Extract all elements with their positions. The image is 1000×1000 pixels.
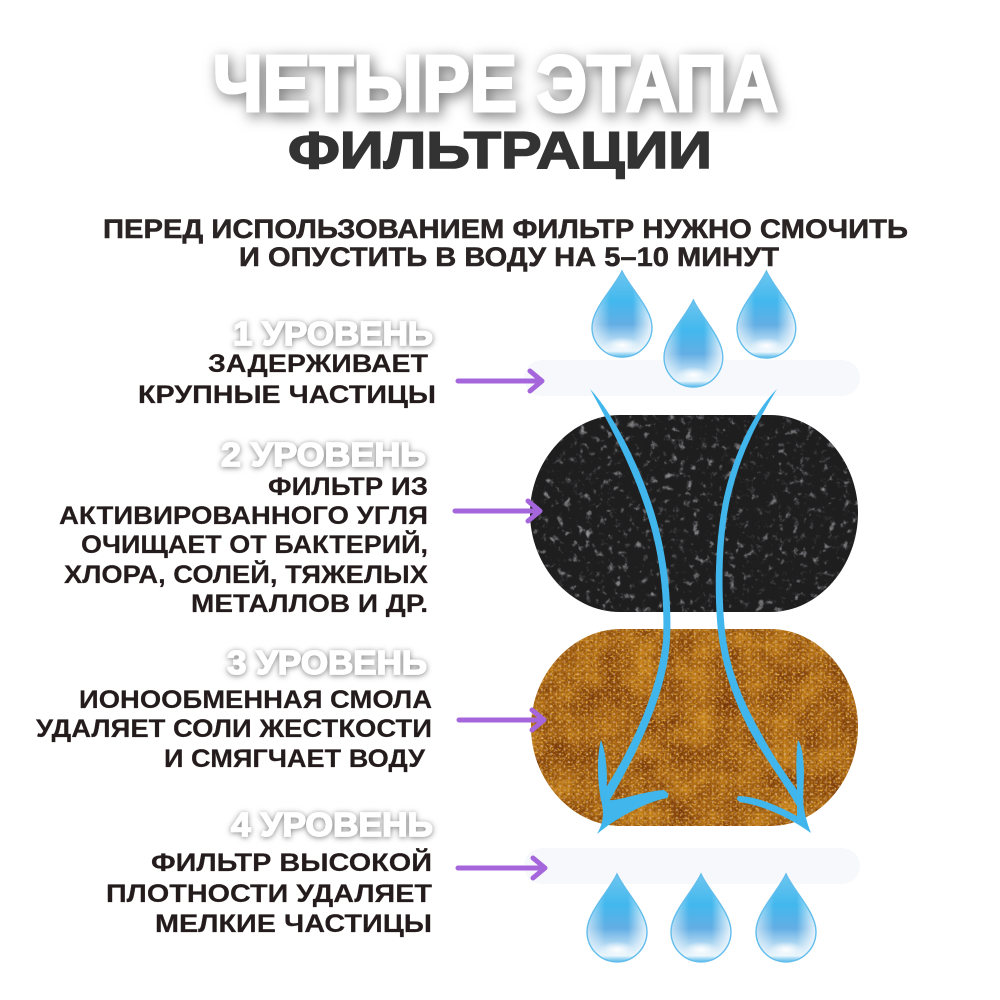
level 4 heading: 4 УРОВЕНЬ [231, 806, 433, 843]
panel: level 2 text [59, 436, 428, 618]
title line: white shadowed: ЧЕТЫРЕ ЭТАПА [213, 39, 778, 128]
level 2 description: АКТИВИРОВАННОГО УГЛЯ [59, 502, 428, 530]
level 3 description [36, 686, 432, 773]
level 2 description: ФИЛЬТР ИЗ [268, 473, 428, 501]
icons: bottom water drops [587, 874, 816, 962]
level 4 description: МЕЛКИЕ ЧАСТИЦЫ [155, 910, 432, 938]
level 2 description: ОЧИЩАЕТ ОТ БАКТЕРИЙ, [81, 529, 428, 559]
filter layer 1: light bar [524, 360, 860, 396]
arrow: right water flow [716, 389, 811, 833]
panel: level 4 text [106, 806, 433, 938]
level 1 description [138, 350, 436, 409]
level 2 description: ХЛОРА, СОЛЕЙ, ТЯЖЕЛЫХ [64, 559, 428, 589]
panel: level 3 text [36, 644, 432, 773]
level 3 description: И СМЯГЧАЕТ ВОДУ [164, 745, 425, 773]
arrow: level 3 pointer [459, 710, 544, 730]
icons: top water drops [592, 271, 796, 387]
level 4 description: ПЛОТНОСТИ УДАЛЯЕТ [106, 880, 432, 908]
arrow: level 2 pointer [455, 501, 540, 521]
filter layer 2: activated charcoal [530, 415, 858, 612]
level 2 description [59, 473, 428, 618]
arrow: level 1 pointer [458, 371, 542, 391]
subtitle instruction [103, 214, 908, 272]
level 1 heading: 1 УРОВЕНЬ [233, 315, 433, 352]
panel: level 1 text [138, 315, 436, 409]
level 3 description: УДАЛЯЕТ СОЛИ ЖЕСТКОСТИ [36, 715, 432, 743]
arrow: left water flow [590, 389, 670, 834]
filter layer 3: ion exchange resin [531, 629, 858, 826]
level 1 description: КРУПНЫЕ ЧАСТИЦЫ [138, 381, 436, 409]
level 2 heading: 2 УРОВЕНЬ [221, 436, 426, 473]
level 4 description: ФИЛЬТР ВЫСОКОЙ [151, 847, 432, 877]
subtitle instruction: ПЕРЕД ИСПОЛЬЗОВАНИЕМ ФИЛЬТР НУЖНО СМОЧИТЬ [103, 214, 908, 244]
arrow: level 4 pointer [458, 858, 545, 878]
title [213, 39, 778, 180]
subtitle instruction: И ОПУСТИТЬ В ВОДУ НА 5–10 МИНУТ [239, 242, 780, 272]
level 2 description: МЕТАЛЛОВ И ДР. [191, 590, 428, 618]
level 3 heading: 3 УРОВЕНЬ [227, 644, 427, 681]
level 3 description: ИОНООБМЕННАЯ СМОЛА [79, 686, 432, 714]
level 1 description: ЗАДЕРЖИВАЕТ [208, 350, 428, 378]
title line: dark: ФИЛЬТРАЦИИ [288, 122, 712, 180]
level 4 description [106, 847, 432, 938]
filter layer 4: light bar [524, 848, 860, 884]
